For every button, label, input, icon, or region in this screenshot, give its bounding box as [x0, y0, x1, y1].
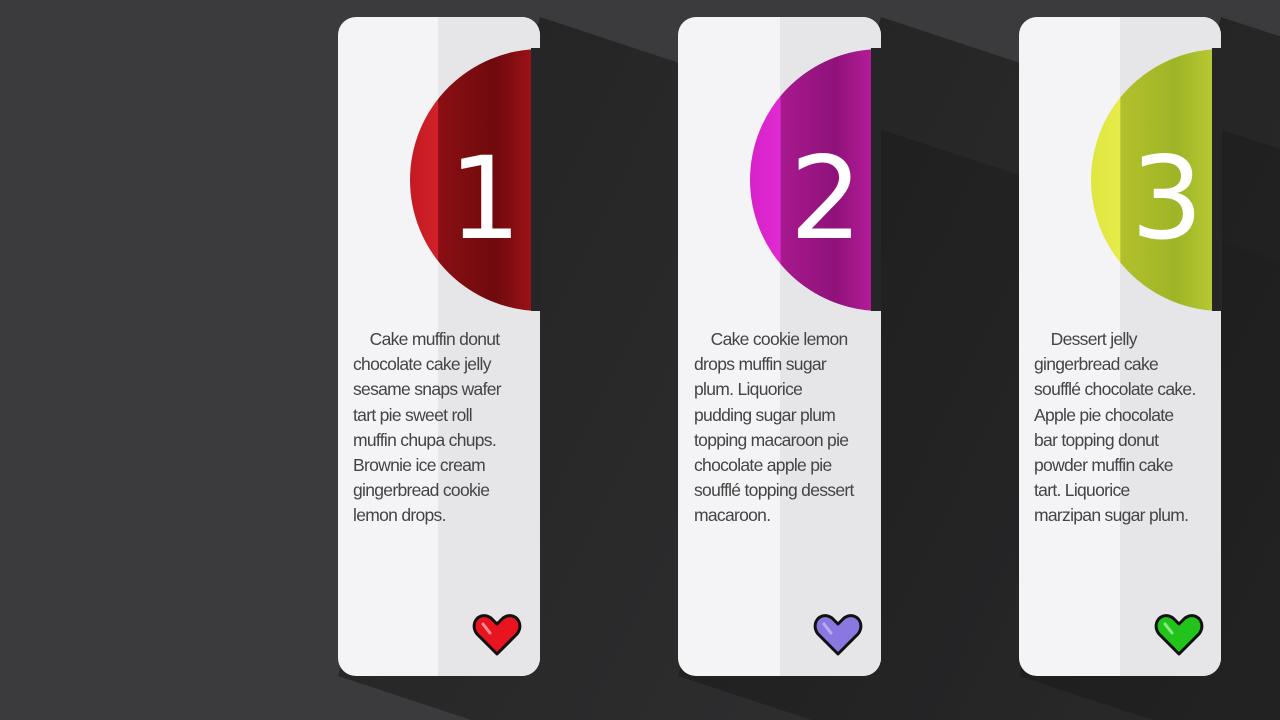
text block 1: gingerbread cookie	[353, 480, 489, 500]
text block 1: chocolate cake jelly	[353, 354, 491, 374]
text block 2: topping macaroon pie	[694, 430, 848, 450]
card 1: 1	[449, 132, 521, 265]
text block 1: tart pie sweet roll	[353, 405, 472, 425]
text block 3: tart. Liquorice	[1034, 480, 1130, 500]
text block 2: chocolate apple pie	[694, 455, 832, 475]
icon: heart purple	[815, 616, 861, 654]
text block 3: powder muffin cake	[1034, 455, 1173, 475]
text block 2: pudding sugar plum	[694, 405, 835, 425]
text block 3: bar topping donut	[1034, 430, 1158, 450]
text block 2: drops muffin sugar	[694, 354, 826, 374]
icon: heart green	[1156, 616, 1202, 654]
text block 2: soufflé topping dessert	[694, 480, 854, 500]
text block 3: Dessert jelly	[1051, 329, 1137, 349]
text block 3: gingerbread cake	[1034, 354, 1158, 374]
text block 1: lemon drops.	[353, 505, 446, 525]
card 3: 3	[1131, 132, 1203, 265]
card 1	[338, 17, 540, 676]
text block 1: sesame snaps wafer	[353, 379, 501, 399]
background and cards	[338, 17, 1280, 720]
text block 3: Apple pie chocolate	[1034, 405, 1173, 425]
card 2	[678, 17, 881, 676]
shadows	[338, 17, 1280, 720]
card 2: 2	[790, 132, 862, 265]
text block 3: marzipan sugar plum.	[1034, 505, 1188, 525]
card 3	[1019, 17, 1222, 676]
text block 1: Cake muffin donut	[370, 329, 499, 349]
text block 3: soufflé chocolate cake.	[1034, 379, 1196, 399]
text block 1	[353, 329, 502, 525]
text block 2	[694, 329, 854, 525]
text block 2: plum. Liquorice	[694, 379, 802, 399]
text block 1: muffin chupa chups.	[353, 430, 496, 450]
text block 2: macaroon.	[694, 505, 770, 525]
text block 3	[1034, 329, 1196, 525]
text block 2: Cake cookie lemon	[711, 329, 848, 349]
text block 1: Brownie ice cream	[353, 455, 485, 475]
icon: heart red	[474, 616, 520, 654]
